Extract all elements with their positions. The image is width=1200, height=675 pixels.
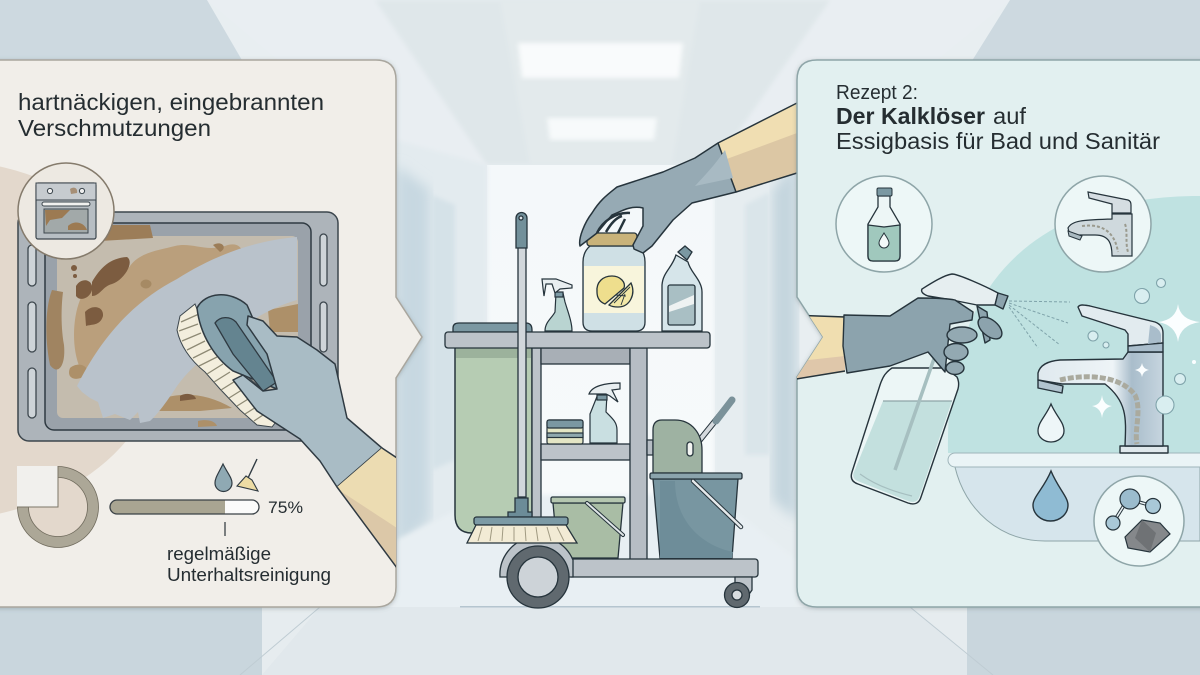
- sparkles: [1092, 304, 1200, 418]
- cleaned swipe area: [77, 237, 297, 423]
- bag lid: [453, 323, 532, 332]
- icon: water drop: [215, 464, 232, 492]
- faucet with limescale: [1038, 305, 1168, 453]
- heading: stubborn stains: Verschmutzungen: [18, 115, 211, 141]
- sink basin: [948, 453, 1200, 541]
- heading: recipe title: Rezept 2:: [836, 82, 918, 104]
- arm in notch: [797, 314, 846, 380]
- gloved hand reaching for jar: [580, 103, 797, 253]
- beige decorative blob: [0, 160, 165, 520]
- bottom deck with casters: [500, 537, 758, 608]
- heading: recipe title: [836, 82, 1160, 154]
- gloved hand: [233, 316, 382, 487]
- wringer bucket: [650, 400, 742, 558]
- icon: faucet with limescale in circle: [1055, 176, 1151, 272]
- icon: molecule and limestone in circle: [1094, 476, 1184, 566]
- teal decorative circle: [948, 196, 1200, 453]
- progress bar: [110, 500, 259, 514]
- spray bottle: [851, 336, 959, 504]
- heading: recipe title: Der Kalklöser: [836, 103, 985, 129]
- spray mist: [1009, 301, 1070, 348]
- lemon jar: [583, 233, 645, 331]
- caption: regular maintenance cleaning: Unterhaltsreinigung: [167, 565, 331, 585]
- cart frame: [445, 332, 710, 560]
- heading: recipe title: Essigbasis für Bad und Sanitär: [836, 128, 1160, 154]
- arm: [337, 448, 400, 572]
- blue water drop: [1033, 471, 1068, 521]
- panel: recipe 2, limescale remover: [790, 60, 1200, 607]
- caption: regular maintenance cleaning: regelmäßige: [167, 544, 271, 564]
- progress value: 75%: [268, 499, 303, 517]
- small spray bottle, top shelf: [542, 279, 572, 331]
- mop with handle and bristle head: [467, 212, 577, 543]
- heading: stubborn stains: [18, 89, 324, 141]
- panel: baked-on dirt on oven tray: [0, 60, 422, 607]
- panel background: [0, 60, 422, 607]
- burnt stains: [46, 225, 298, 427]
- spray bottle, middle shelf: [589, 383, 620, 443]
- oven icon circle: [18, 163, 114, 259]
- heading: stubborn stains: hartnäckigen, eingebrannten: [18, 89, 324, 115]
- gloved hand holding spray bottle: [843, 298, 1006, 374]
- spray head: [922, 274, 1008, 343]
- small green bucket: [551, 497, 625, 558]
- caption: regular maintenance cleaning: [167, 544, 331, 585]
- oven tray illustration: [18, 212, 338, 441]
- detergent bottle: [662, 246, 702, 331]
- sponges: [547, 420, 583, 444]
- progress tick: [224, 522, 226, 536]
- water droplet: [1038, 404, 1064, 442]
- bubbles: [1088, 278, 1186, 414]
- donut chart: 75 percent: [17, 466, 98, 548]
- waste bag: [455, 348, 532, 533]
- icon: vinegar bottle in circle: [836, 176, 932, 272]
- floor line: [460, 606, 760, 608]
- icon: broom: [237, 459, 258, 491]
- scrub brush: [177, 295, 285, 427]
- heading: recipe title: auf: [993, 103, 1027, 129]
- illustration: cleaning cart: [445, 103, 797, 608]
- panel background: [797, 60, 1200, 607]
